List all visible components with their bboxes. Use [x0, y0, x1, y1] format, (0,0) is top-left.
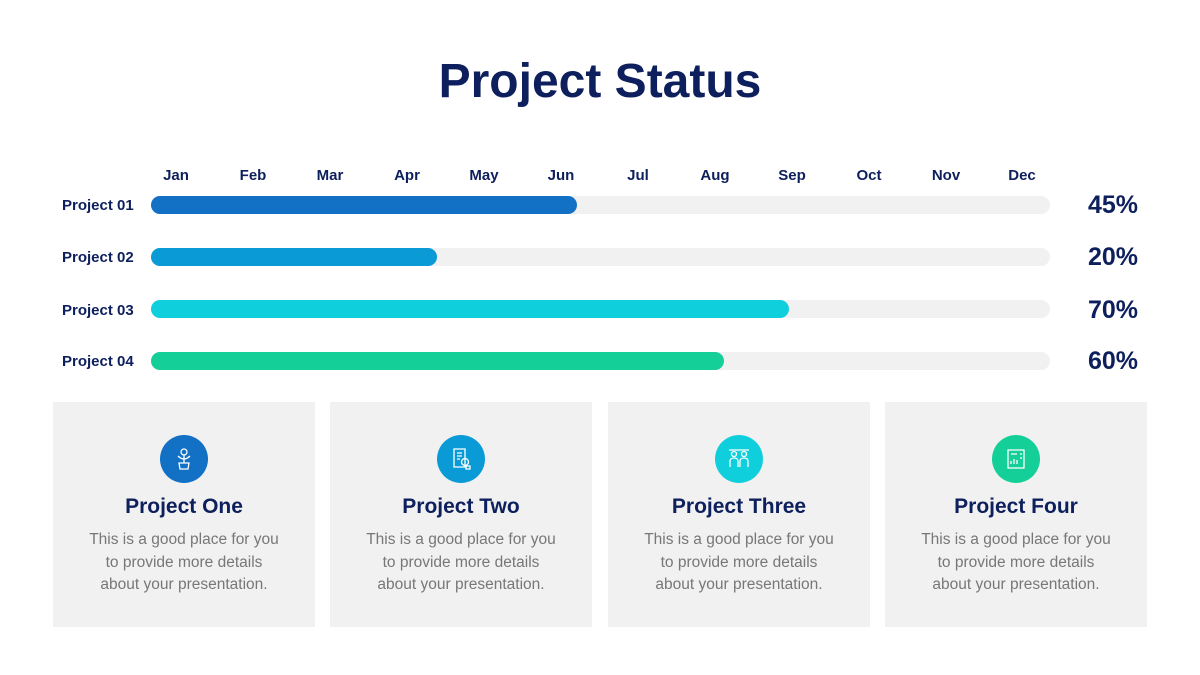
row: project 01: 45%: [1088, 191, 1138, 219]
card: project two: about your presentation.: [377, 576, 545, 593]
card: project one: [53, 402, 315, 627]
month axis: Jun: [548, 167, 574, 184]
row: project 02: [62, 243, 1138, 271]
month axis: Oct: [856, 167, 882, 184]
card: project three: to provide more details: [661, 554, 817, 570]
month axis: Apr: [394, 167, 420, 184]
card: project four: about your presentation.: [932, 576, 1100, 593]
month axis: [163, 167, 1036, 184]
month axis: Nov: [932, 167, 960, 184]
card: project one: This is a good place for you: [89, 531, 279, 548]
card: project three: This is a good place for you: [644, 531, 834, 548]
row: project 02: 20%: [1088, 243, 1138, 271]
month axis: Dec: [1008, 167, 1036, 184]
icon: plant: [160, 435, 208, 483]
card: project three: [608, 402, 870, 627]
title: Project Status: [439, 55, 761, 108]
month axis: Feb: [240, 167, 266, 184]
card: project one: Project One: [125, 495, 243, 518]
card: project two: This is a good place for you: [366, 531, 556, 548]
month axis: Jan: [163, 167, 189, 184]
card: project one: about your presentation.: [100, 576, 268, 593]
row: project 03: 70%: [1088, 296, 1138, 324]
row: project 03: [62, 296, 1138, 324]
row: project 04: 60%: [1088, 347, 1138, 375]
card: project one: to provide more details: [106, 554, 262, 570]
month axis: Sep: [778, 167, 806, 184]
month axis: Jul: [627, 167, 649, 184]
card: project two: to provide more details: [383, 554, 539, 570]
card: project four: This is a good place for you: [921, 531, 1111, 548]
row: project 04: Project 04: [62, 353, 134, 370]
card: project three: Project Three: [672, 495, 806, 518]
card: project four: Project Four: [954, 495, 1078, 518]
month axis: Aug: [700, 167, 730, 184]
row: project 02: Project 02: [62, 249, 134, 266]
month axis: Mar: [317, 167, 343, 184]
row: project 03: Project 03: [62, 302, 134, 319]
icon: chart report: [992, 435, 1040, 483]
icon: team: [715, 435, 763, 483]
icon: document coins: [437, 435, 485, 483]
card: project four: [885, 402, 1147, 627]
card: project two: [330, 402, 592, 627]
month axis: May: [469, 167, 499, 184]
card: project four: to provide more details: [938, 554, 1094, 570]
row: project 04: [62, 347, 1138, 375]
card: project two: Project Two: [402, 495, 520, 518]
card: project three: about your presentation.: [655, 576, 823, 593]
row: project 01: Project 01: [62, 197, 134, 214]
row: project 01: [62, 191, 1138, 219]
